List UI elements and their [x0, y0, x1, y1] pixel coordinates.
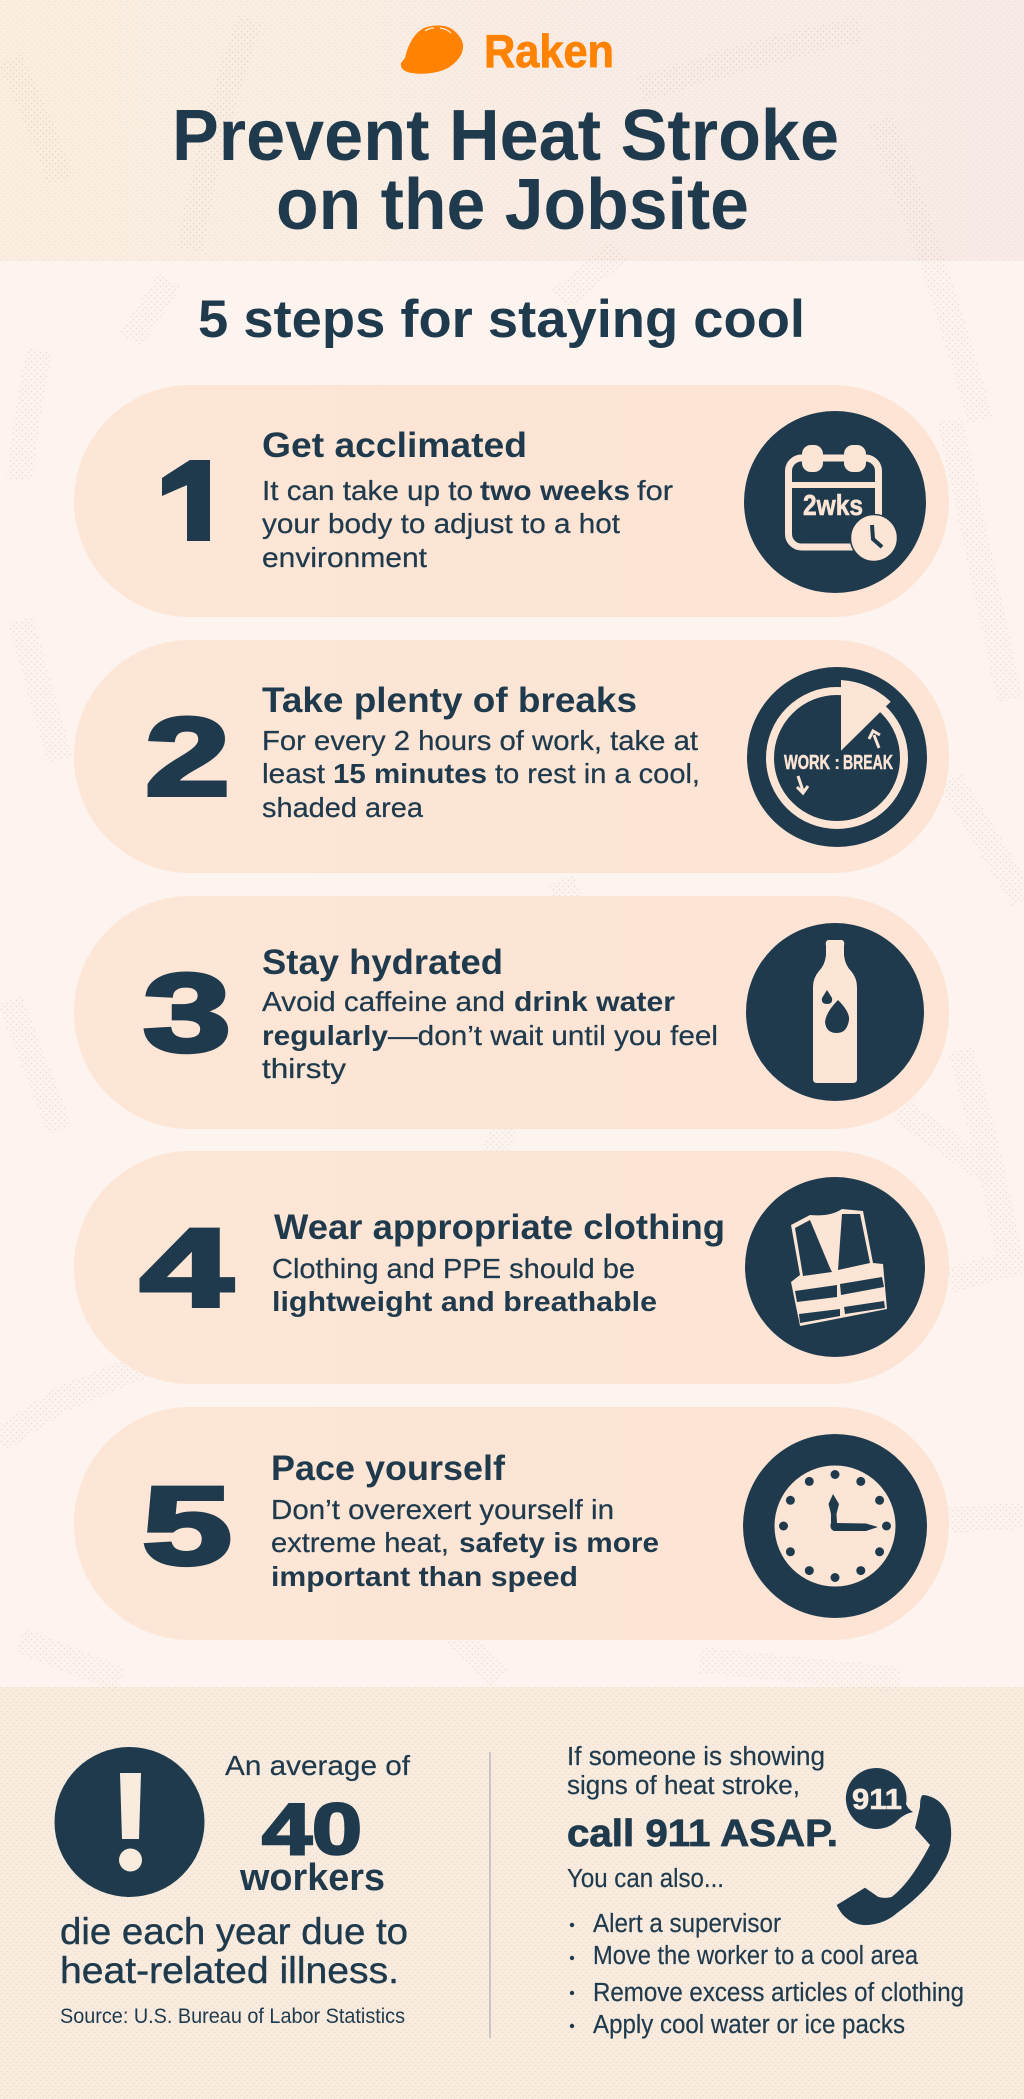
body text: your body to adjust to a hot — [262, 508, 620, 539]
text: signs of heat stroke: signs of heat stroke, — [567, 1772, 800, 1800]
body text: environment — [262, 542, 427, 573]
panel: step 4 — [74, 1151, 949, 1384]
panel: step 2 — [74, 640, 949, 873]
action list: Remove excess articles of clothing — [593, 1979, 964, 2007]
body text — [262, 725, 700, 823]
body text: drink water — [514, 986, 675, 1017]
number 5: 5 — [142, 1464, 232, 1588]
title: Prevent Heat Stroke — [172, 96, 839, 176]
icon: phone with 911 bubble: 911 — [852, 1784, 902, 1816]
text: call 911 ASAP: call 911 ASAP. — [567, 1813, 838, 1855]
heading: Take plenty of breaks — [262, 681, 637, 720]
footer texture — [0, 1687, 1024, 2099]
icon: calendar two weeks — [744, 411, 926, 593]
pill background — [74, 1407, 949, 1640]
icon: phone with 911 bubble — [837, 1768, 951, 1925]
pill background — [74, 385, 949, 617]
body text: thirsty — [262, 1053, 346, 1084]
wordmark: Raken — [484, 25, 614, 77]
text: you can also: You can also... — [567, 1865, 724, 1893]
pill background — [74, 640, 949, 873]
action list: Alert a supervisor — [593, 1910, 781, 1938]
body text: Don’t overexert yourself in — [271, 1494, 614, 1525]
text: die each year: die each year due to — [60, 1911, 408, 1952]
icon: clock — [743, 1434, 927, 1618]
number 40: 40 — [262, 1790, 362, 1870]
icon: water bottle — [746, 923, 924, 1101]
text: die each year: heat-related illness. — [60, 1950, 399, 1991]
heading: Wear appropriate clothing — [274, 1208, 725, 1247]
pill background — [74, 1151, 949, 1384]
body text: For every 2 hours of work, take at — [262, 725, 698, 756]
text: die each year — [60, 1911, 408, 1991]
icon: work break timer: WORK — [784, 752, 830, 774]
body text — [271, 1494, 659, 1592]
icon: exclamation mark — [54, 1747, 204, 1897]
body text: important than speed — [271, 1561, 578, 1592]
body text — [262, 986, 718, 1084]
action list — [570, 1910, 964, 2039]
number 2: 2 — [145, 695, 230, 819]
body text: It can take up to — [262, 475, 473, 506]
body text: to rest in a cool, — [495, 758, 700, 789]
body text: Clothing and PPE should be — [272, 1253, 635, 1284]
number 1: 1 — [158, 439, 220, 563]
panel: step 3 — [74, 896, 949, 1129]
heading: Pace yourself — [271, 1449, 505, 1488]
body text: for — [637, 475, 673, 506]
text: signs of heat stroke — [567, 1743, 825, 1800]
icon: safety vest — [745, 1177, 925, 1357]
body text: 15 minutes — [333, 758, 487, 789]
header texture — [0, 0, 1024, 261]
title: on the Jobsite — [276, 165, 749, 245]
number 3: 3 — [143, 951, 231, 1075]
logo: Raken — [401, 25, 614, 77]
source: Source: U.S. Bureau of Labor Statistics — [60, 2005, 405, 2028]
body text: —don’t wait until you feel — [388, 1020, 718, 1051]
header band — [0, 0, 1024, 261]
action list: Apply cool water or ice packs — [593, 2011, 905, 2039]
icon: work break timer: : — [834, 753, 840, 774]
heading: Get acclimated — [262, 426, 527, 465]
number 4: 4 — [140, 1206, 233, 1330]
body text: least — [262, 758, 325, 789]
icon: calendar two weeks: 2wks — [803, 490, 863, 522]
body text: Avoid caffeine and — [262, 986, 505, 1017]
panel: call 911 — [567, 1743, 964, 2039]
panel: step 1 — [74, 385, 949, 617]
heading: Stay hydrated — [262, 943, 503, 982]
text: workers: workers — [239, 1857, 385, 1899]
text: signs of heat stroke: If someone is showing — [567, 1743, 825, 1771]
body text: lightweight and breathable — [272, 1286, 657, 1317]
icon: work break timer — [747, 667, 927, 847]
pill background — [74, 896, 949, 1129]
number 1 — [162, 460, 210, 541]
panel: workers statistic — [54, 1747, 410, 2028]
footer band — [0, 1687, 1024, 2099]
body text: extreme heat, — [271, 1527, 449, 1558]
body text: regularly — [262, 1020, 389, 1051]
body text — [262, 475, 673, 573]
body text: two weeks — [480, 475, 630, 506]
text: an average of: An average of — [225, 1750, 410, 1781]
body text — [272, 1253, 657, 1317]
subtitle: 5 steps for staying cool — [198, 290, 805, 349]
icon: work break timer: BREAK — [843, 752, 893, 774]
icon: orange hard hat — [401, 25, 463, 74]
action list: Move the worker to a cool area — [593, 1942, 919, 1970]
title — [172, 96, 839, 245]
body text: safety is more — [459, 1527, 659, 1558]
panel: step 5 — [74, 1407, 949, 1640]
body text: shaded area — [262, 792, 424, 823]
